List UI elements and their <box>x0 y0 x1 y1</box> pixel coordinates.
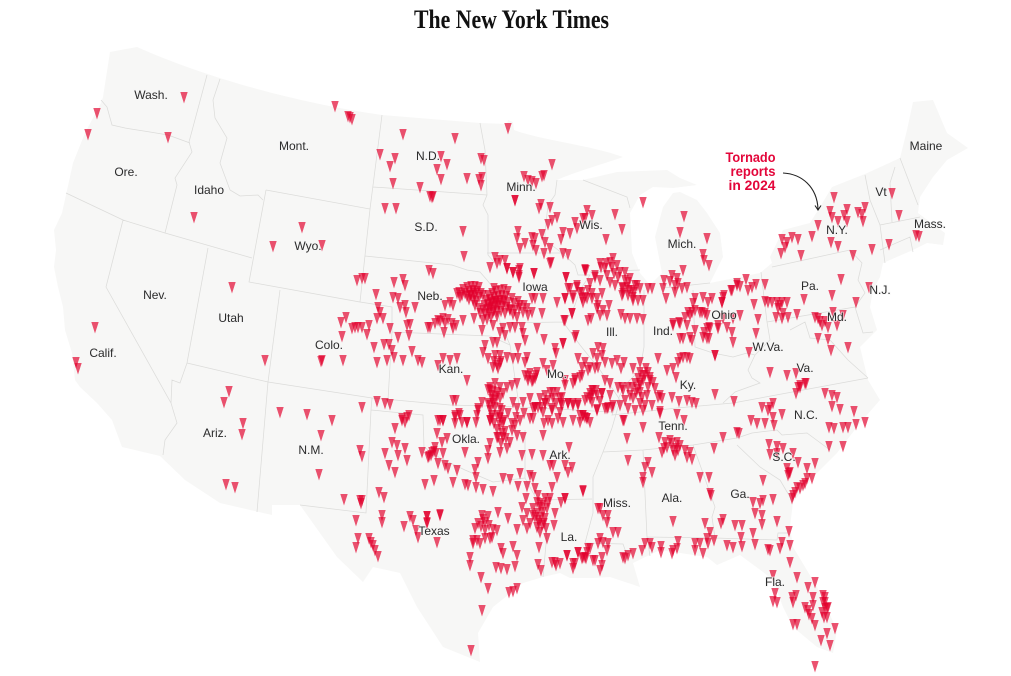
state labels: Tenn. <box>658 419 688 433</box>
state labels: Va. <box>796 361 814 375</box>
tornado markers: Arkansas, east Texas and Louisiana <box>427 442 598 645</box>
state labels: N.J. <box>869 283 891 297</box>
tornado markers: Wisconsin <box>561 197 643 265</box>
state labels: N.M. <box>298 443 324 457</box>
state labels: Utah <box>218 311 244 325</box>
tornado markers: Indiana and Ohio <box>673 274 765 350</box>
state labels: Wis. <box>579 218 603 232</box>
state labels: Iowa <box>522 280 548 294</box>
state labels: Miss. <box>603 496 631 510</box>
tornado markers: eastern Nebraska core <box>428 281 518 327</box>
title: newspaper nameplate: The New York Times <box>414 5 609 34</box>
arrow: callout to map <box>783 173 821 210</box>
tornado markers: Southwest and west Texas <box>224 386 440 551</box>
tornado markers: Tennessee <box>624 408 692 455</box>
state labels: Mass. <box>914 217 946 231</box>
state labels: Ark. <box>549 448 571 462</box>
state labels: Neb. <box>417 289 443 303</box>
tornado markers: Oklahoma <box>422 398 590 486</box>
tornado markers: Michigan <box>663 211 709 293</box>
state labels: Ariz. <box>203 426 227 440</box>
state labels: Idaho <box>194 183 224 197</box>
tornado markers: Pennsylvania, Maryland and Virginia <box>765 274 869 382</box>
state labels: Okla. <box>452 432 480 446</box>
state labels: Minn. <box>506 180 536 194</box>
state labels: S.C. <box>772 450 796 464</box>
callout: Tornado reports in 2024: reports <box>730 163 776 179</box>
state labels: Ga. <box>730 487 750 501</box>
state labels: N.Y. <box>826 223 848 237</box>
callout: Tornado reports in 2024 <box>726 149 776 193</box>
state labels: Pa. <box>801 279 819 293</box>
tornado markers: extra overlap, central plains <box>470 258 650 402</box>
state labels: Ohio <box>711 308 737 322</box>
state labels: Vt <box>875 185 887 199</box>
state labels: Ore. <box>114 165 138 179</box>
state labels: Colo. <box>315 338 343 352</box>
state labels: Mo. <box>547 367 567 381</box>
state labels: N.C. <box>794 408 818 422</box>
state labels: Ind. <box>653 324 673 338</box>
tornado markers: Florida <box>773 570 835 661</box>
state labels: Wyo. <box>294 239 322 253</box>
tornado markers: southern Illinois and Kentucky <box>560 332 734 415</box>
state labels: Ky. <box>680 378 696 392</box>
state labels: La. <box>561 530 577 544</box>
callout: Tornado reports in 2024: Tornado <box>726 149 776 165</box>
state labels: S.D. <box>414 220 438 234</box>
tornado markers: northern Illinois <box>565 253 652 315</box>
state labels: Texas <box>418 524 450 538</box>
state labels <box>89 88 946 589</box>
state labels: Ala. <box>662 491 682 505</box>
tornado markers: Nebraska and Colorado <box>321 265 433 357</box>
state labels: Fla. <box>765 575 785 589</box>
state labels: Wash. <box>134 88 168 102</box>
state labels: Mont. <box>279 139 309 153</box>
state labels: Calif. <box>89 346 117 360</box>
tornado markers: New York and New England <box>781 188 919 250</box>
tornado markers: Dakotas <box>380 123 515 251</box>
tornado markers: Georgia and Alabama <box>623 457 790 557</box>
tornado markers: Mississippi and Gulf Coast <box>552 485 618 565</box>
state labels: Maine <box>910 139 943 153</box>
tornado markers: Kansas <box>377 337 538 417</box>
tornado markers: Missouri <box>507 358 613 415</box>
state labels: Nev. <box>143 288 167 302</box>
state labels: Mich. <box>668 237 696 251</box>
callout: Tornado reports in 2024: in 2024 <box>728 177 776 193</box>
tornado markers: Pacific Northwest and Rockies <box>76 92 352 363</box>
state labels: N.D. <box>416 149 440 163</box>
tornado markers: Carolinas and Virginia <box>714 378 865 493</box>
state labels: W.Va. <box>752 340 784 354</box>
state borders <box>66 75 920 577</box>
tornado markers: Iowa and southern Minnesota <box>490 159 585 348</box>
state labels: Kan. <box>439 362 463 376</box>
state labels: Ill. <box>606 325 618 339</box>
state labels: Md. <box>827 310 847 324</box>
